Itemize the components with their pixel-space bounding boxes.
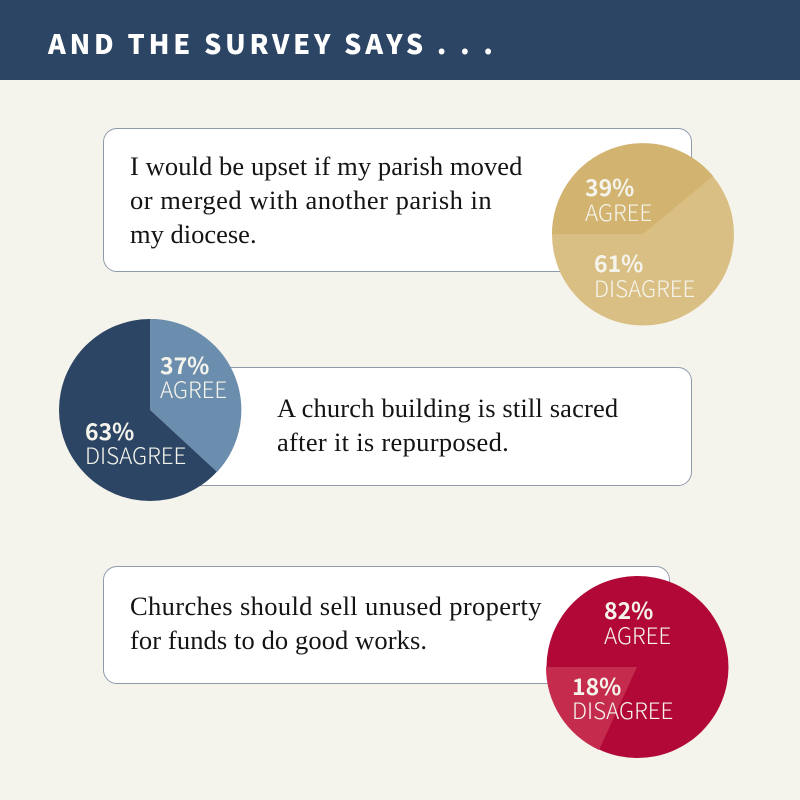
pie chart: statement 1: 61% <box>594 245 643 279</box>
text: statement 3: for funds to do good works. <box>130 625 427 655</box>
pie chart: statement 3 <box>546 576 728 758</box>
panel: statement 3 <box>103 566 670 684</box>
panel: statement 1 <box>103 128 692 272</box>
pie chart: statement 1: 39% <box>585 169 634 203</box>
pie chart: statement 2 <box>59 319 241 501</box>
pie chart: statement 2: 37% <box>160 347 209 381</box>
panel: statement 2 <box>150 367 692 486</box>
text: statement 2: after it is repurposed. <box>277 427 509 457</box>
pie chart: statement 3: AGREE <box>604 619 671 651</box>
pie chart: statement 1: AGREE <box>585 196 652 228</box>
pie chart: statement 2: 63% <box>85 413 134 447</box>
text: statement 2: A church building is still sacred <box>277 393 618 423</box>
pie chart: statement 1 <box>552 143 734 326</box>
pie chart: statement 3: 82% <box>604 592 653 626</box>
text: statement 1 <box>130 151 522 249</box>
header band <box>0 0 800 80</box>
text: statement 1: my diocese. <box>130 219 257 249</box>
pie chart: statement 3: 18% <box>572 668 621 702</box>
pie chart: statement 2: AGREE <box>160 373 227 405</box>
pie chart: statement 2: DISAGREE <box>85 439 186 471</box>
pie chart: statement 3: DISAGREE <box>572 694 673 726</box>
text: statement 3: Churches should sell unused property <box>130 591 542 621</box>
text: statement 2 <box>277 393 618 457</box>
text: statement 1: or merged with another parish in <box>130 185 492 215</box>
text: statement 3 <box>130 591 542 655</box>
title: AND THE SURVEY SAYS . . . <box>48 23 497 62</box>
text: statement 1: I would be upset if my parish moved <box>130 151 522 181</box>
pie chart: statement 1: DISAGREE <box>594 272 695 304</box>
